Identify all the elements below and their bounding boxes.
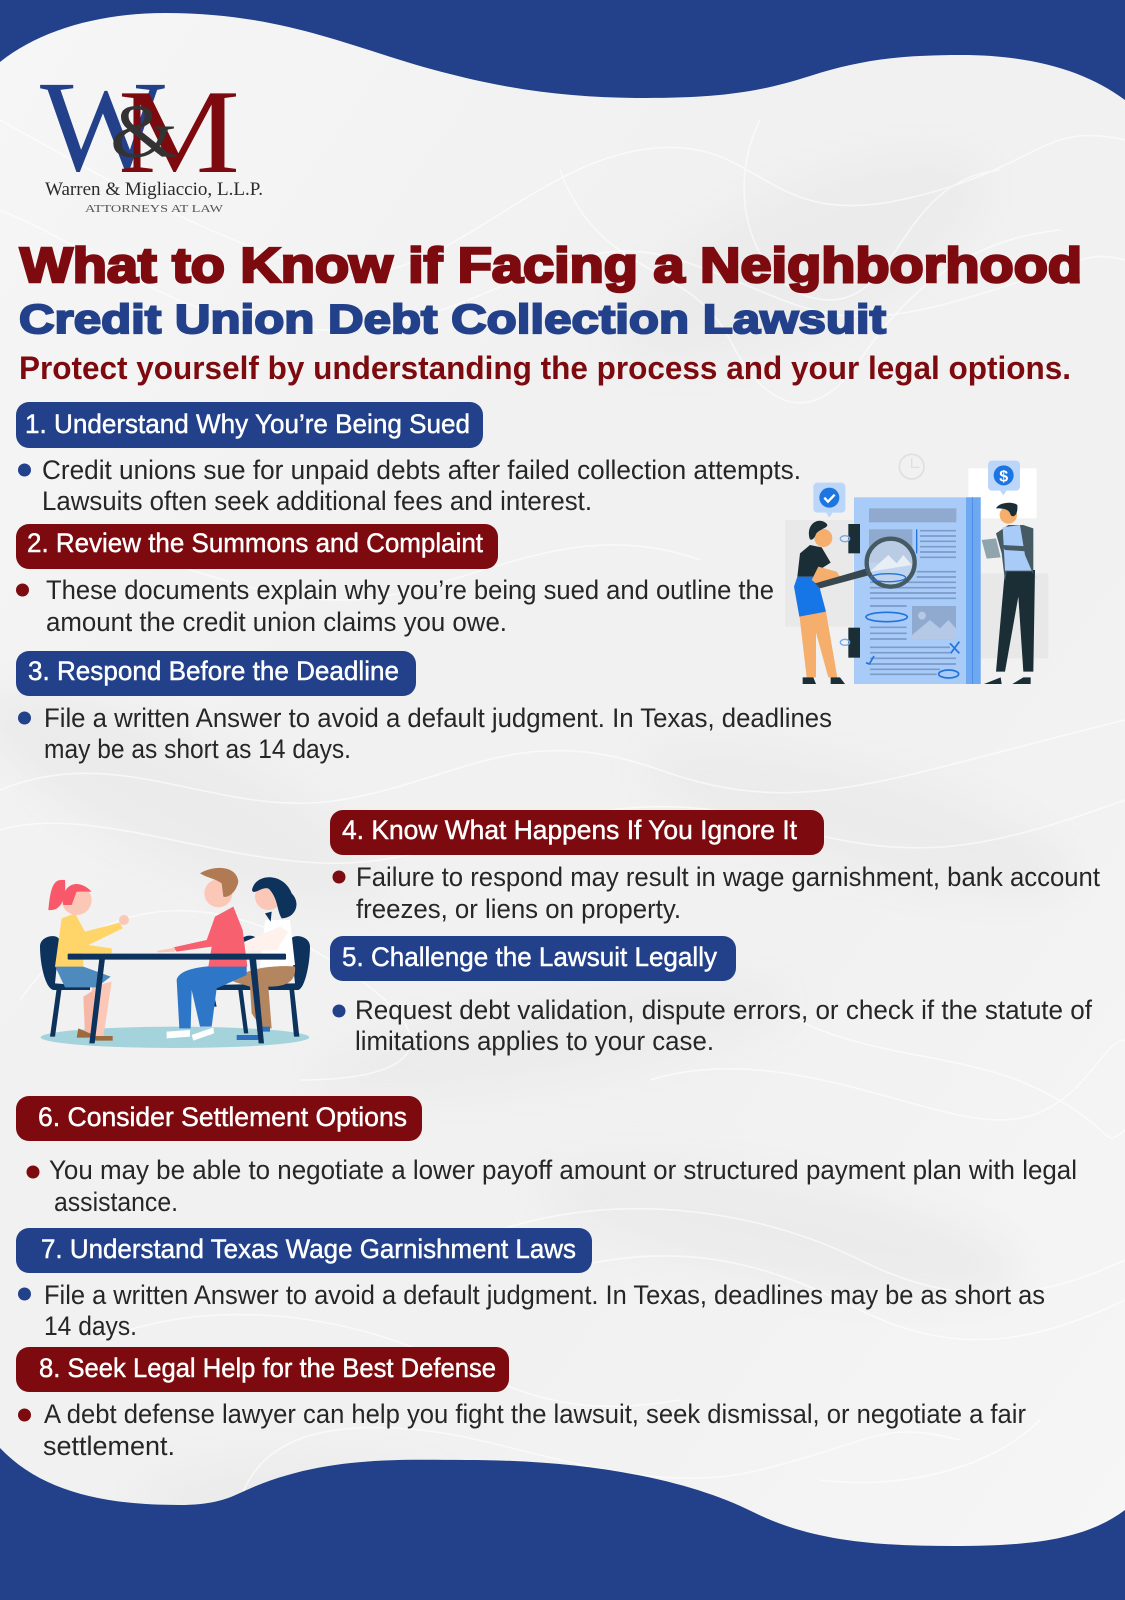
section 5: 5. Challenge the Lawsuit Legally xyxy=(342,942,718,972)
section 3: File a written Answer to avoid a default judgment. In Texas, deadlines xyxy=(44,703,832,733)
section 1 xyxy=(16,402,801,516)
magnifier lens xyxy=(867,539,915,587)
section 3: may be as short as 14 days. xyxy=(44,734,351,764)
section 3 xyxy=(16,651,832,764)
logo: Warren & Migliaccio: ATTORNEYS AT LAW xyxy=(85,203,224,215)
title: Credit Union Debt Collection Lawsuit xyxy=(19,296,886,342)
icon: dollar badge xyxy=(988,461,1020,495)
section 4: freezes, or liens on property. xyxy=(356,894,681,924)
section 2: amount the credit union claims you owe. xyxy=(46,607,507,637)
icon: check badge xyxy=(813,483,845,517)
section 8 xyxy=(16,1347,1026,1461)
title: What to Know if Facing a Neighborhood xyxy=(20,239,1082,293)
section 4: 4. Know What Happens If You Ignore It xyxy=(342,815,798,845)
section 2 xyxy=(16,524,774,637)
section 5: Request debt validation, dispute errors, or check if the statute of xyxy=(355,995,1093,1025)
title xyxy=(19,239,1082,342)
section 6: assistance. xyxy=(54,1187,178,1217)
section 8: settlement. xyxy=(43,1431,175,1461)
section 5: limitations applies to your case. xyxy=(355,1026,714,1056)
woman with red hair xyxy=(48,880,129,1041)
section 1: Credit unions sue for unpaid debts after failed collection attempts. xyxy=(42,455,801,485)
woman with dark hair xyxy=(225,877,296,1040)
top blue wave xyxy=(0,0,1125,100)
section 4: Failure to respond may result in wage garnishment, bank account xyxy=(356,862,1101,892)
section 6: You may be able to negotiate a lower payoff amount or structured payment plan with legal xyxy=(49,1155,1077,1185)
bottom blue wave xyxy=(0,1448,1125,1600)
man with tablet xyxy=(982,503,1038,684)
binder clips xyxy=(840,524,860,658)
section 6 xyxy=(16,1096,1077,1217)
subtitle: Protect yourself by understanding the process and your legal options. xyxy=(19,350,1071,386)
section 4 xyxy=(330,810,1101,924)
icon: dollar badge: $ xyxy=(999,468,1008,485)
section 1: 1. Understand Why You’re Being Sued xyxy=(25,409,470,439)
logo: Warren & Migliaccio: & xyxy=(110,90,178,174)
section 1: Lawsuits often seek additional fees and interest. xyxy=(42,486,592,516)
section 8: A debt defense lawyer can help you fight the lawsuit, seek dismissal, or negotiate a fair xyxy=(44,1399,1026,1429)
section 7 xyxy=(16,1228,1045,1341)
logo: Warren & Migliaccio: W xyxy=(40,55,165,199)
section 5 xyxy=(330,936,1093,1056)
logo: Warren & Migliaccio: M xyxy=(118,65,240,198)
section 3: 3. Respond Before the Deadline xyxy=(28,656,399,686)
section 7: 14 days. xyxy=(44,1311,137,1341)
chairs xyxy=(40,936,310,1037)
woman with magnifier xyxy=(794,521,870,684)
man in red sweater xyxy=(157,868,247,1041)
illustration: reviewing documents xyxy=(785,454,1048,684)
section 7: File a written Answer to avoid a default judgment. In Texas, deadlines may be as short as xyxy=(44,1280,1045,1310)
table xyxy=(68,954,286,1043)
section 6: 6. Consider Settlement Options xyxy=(38,1102,407,1132)
section 2: These documents explain why you’re being sued and outline the xyxy=(46,575,774,605)
section 2: 2. Review the Summons and Complaint xyxy=(27,528,484,558)
section 7: 7. Understand Texas Wage Garnishment Laws xyxy=(41,1234,576,1264)
document xyxy=(854,497,981,684)
logo: Warren & Migliaccio: Warren & Migliaccio, L.L.P. xyxy=(45,179,263,200)
section 8: 8. Seek Legal Help for the Best Defense xyxy=(39,1353,496,1383)
logo: Warren & Migliaccio xyxy=(40,55,263,215)
illustration: meeting at table xyxy=(40,868,310,1048)
